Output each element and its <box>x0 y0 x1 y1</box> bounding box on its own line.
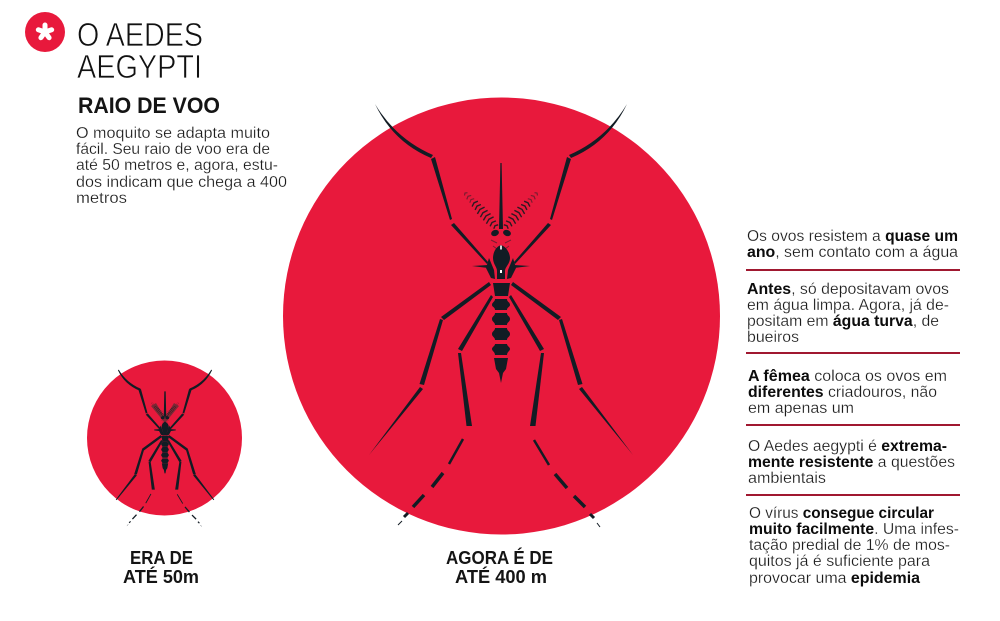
text block: resistance: mente resistente a questões <box>748 454 955 471</box>
panel: small circle, 50 m range <box>87 360 242 527</box>
text block: eggs resist: Os ovos resistem a quase um <box>747 228 958 245</box>
text block: intro: fácil. Seu raio de voo era de <box>76 141 270 158</box>
icon: large mosquito <box>369 104 633 527</box>
text block: intro: dos indicam que chega a 400 <box>76 174 287 191</box>
panel: large circle, 400 m range <box>283 98 720 534</box>
text block: female: A fêmea coloca os ovos em <box>748 368 947 385</box>
text block: virus: provocar uma epidemia <box>749 570 920 587</box>
text block: resistance: O Aedes aegypti é extrema- <box>748 438 947 455</box>
label: era de até 50m: ERA DE <box>130 547 193 568</box>
icon: red asterisk badge <box>25 12 65 52</box>
text block: female: diferentes criadouros, não <box>748 384 937 401</box>
label: era de até 50m <box>123 547 199 587</box>
text block: virus: quitos já é suficiente para <box>749 553 930 570</box>
label: era de até 50m: ATÉ 50m <box>123 566 199 587</box>
text block: eggs resist: ano, sem contato com a água <box>747 244 958 261</box>
heading: raio de voo: RAIO DE VOO <box>78 93 220 118</box>
label: agora é de até 400 m <box>446 547 553 587</box>
text block: intro: O moquito se adapta muito <box>76 125 270 142</box>
text block: female <box>748 368 947 417</box>
text block: virus: tação predial de 1% de mos- <box>749 537 950 554</box>
text block: turbid water <box>747 281 949 346</box>
text block: intro: metros <box>76 190 127 207</box>
text block: intro <box>76 125 287 207</box>
text block: intro: até 50 metros e, agora, estu- <box>76 157 278 174</box>
title: AEGYPTI <box>77 49 202 86</box>
text block: turbid water: em água limpa. Agora, já de- <box>747 297 949 314</box>
text block: resistance <box>748 438 955 487</box>
text block: virus: O vírus consegue circular <box>749 505 934 522</box>
label: agora é de até 400 m: ATÉ 400 m <box>455 566 547 587</box>
text block: turbid water: Antes, só depositavam ovos <box>747 281 949 298</box>
text block: female: em apenas um <box>748 400 854 417</box>
title <box>77 17 203 86</box>
text block: turbid water: bueiros <box>747 329 799 346</box>
text block: virus: muito facilmente. Uma infes- <box>749 521 959 538</box>
title: O AEDES <box>77 17 203 54</box>
text block: turbid water: positam em água turva, de <box>747 313 939 330</box>
label: agora é de até 400 m: AGORA É DE <box>446 547 553 568</box>
icon: small mosquito <box>116 370 214 527</box>
text block: resistance: ambientais <box>748 470 826 487</box>
text block: virus <box>749 505 959 587</box>
text block: eggs resist <box>747 228 958 261</box>
